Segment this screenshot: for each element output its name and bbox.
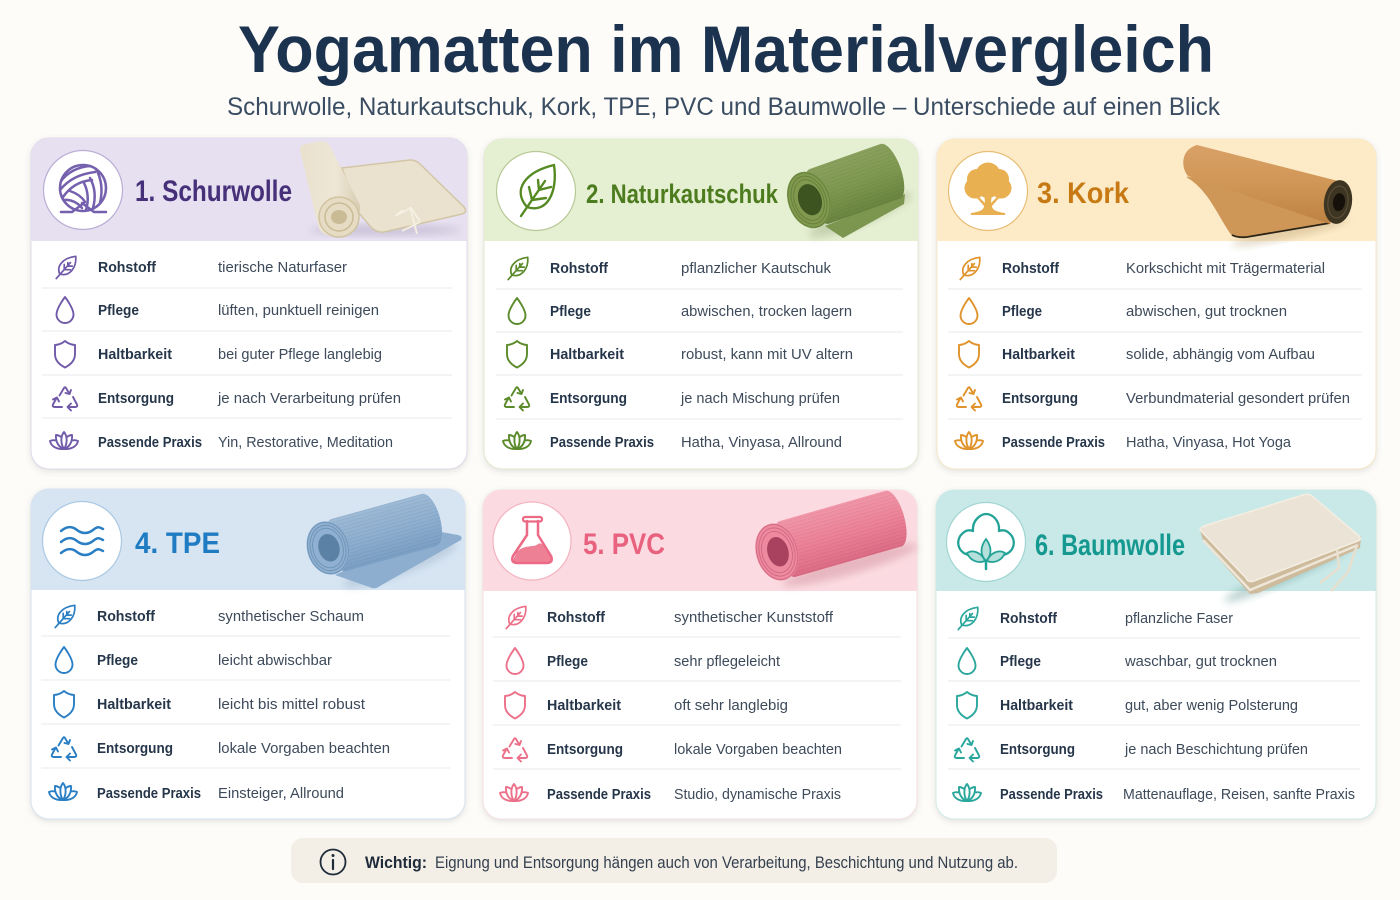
- row: Rohstoff: [55, 605, 364, 628]
- photo: wool mat: [300, 141, 466, 237]
- row: Haltbarkeit: Haltbarkeit: [550, 346, 624, 363]
- row: Pflege: abwischen, trocken lagern: [681, 303, 852, 320]
- row: Passende Praxis: [500, 784, 841, 803]
- row: Haltbarkeit: Haltbarkeit: [97, 696, 171, 713]
- icon: waves: [42, 502, 122, 580]
- row: Entsorgung: Entsorgung: [98, 390, 174, 407]
- row: Passende Praxis: [503, 432, 842, 451]
- row: Haltbarkeit: [505, 692, 788, 718]
- row: Pflege: abwischen, gut trocknen: [1126, 303, 1287, 320]
- row: Haltbarkeit: [54, 691, 366, 718]
- row: Pflege: [508, 298, 852, 324]
- row: Haltbarkeit: [55, 341, 382, 368]
- row: Rohstoff: [508, 257, 831, 280]
- row: Passende Praxis: [50, 432, 393, 451]
- row: Rohstoff: synthetischer Kunststoff: [674, 609, 834, 626]
- row: Passende Praxis: Passende Praxis: [98, 434, 202, 451]
- row: Haltbarkeit: [507, 341, 853, 368]
- row: Haltbarkeit: bei guter Pflege langlebig: [218, 346, 382, 363]
- row: Entsorgung: [52, 737, 390, 760]
- row: Haltbarkeit: Haltbarkeit: [1002, 346, 1075, 363]
- row: Haltbarkeit: [959, 341, 1315, 368]
- row: Passende Praxis: [953, 784, 1355, 803]
- row: Passende Praxis: Passende Praxis: [1000, 786, 1103, 803]
- row: Entsorgung: Entsorgung: [550, 390, 627, 407]
- row: Rohstoff: Rohstoff: [97, 608, 156, 625]
- row: Pflege: Pflege: [97, 652, 138, 669]
- row: Pflege: [958, 648, 1277, 674]
- row: Haltbarkeit: Haltbarkeit: [547, 697, 621, 714]
- row: Haltbarkeit: Haltbarkeit: [1000, 697, 1073, 714]
- row: Passende Praxis: [955, 432, 1292, 451]
- photo: pink PVC mat: [749, 488, 920, 593]
- callout label: Wichtig:: [365, 853, 427, 872]
- heading: 4. TPE: 4. TPE: [135, 527, 220, 560]
- panel: 3. Kork: [937, 139, 1376, 469]
- row: Passende Praxis: [49, 783, 344, 802]
- header band: PVC: [483, 490, 917, 591]
- subtitle: Schurwolle, Naturkautschuk, Kork, TPE, PVC und Baumwolle – Unterschiede auf einen Blick: [227, 93, 1220, 121]
- icon: cotton: [946, 502, 1026, 582]
- row: Haltbarkeit: solide, abhängig vom Aufbau: [1126, 346, 1315, 363]
- row: Entsorgung: Entsorgung: [1002, 390, 1078, 407]
- row: Haltbarkeit: [957, 692, 1298, 718]
- title: Yogamatten im Materialvergleich: [238, 12, 1214, 86]
- row: Pflege: lüften, punktuell reinigen: [218, 302, 379, 319]
- row: Rohstoff: Rohstoff: [547, 609, 606, 626]
- row: Rohstoff: [960, 257, 1325, 280]
- row: Haltbarkeit: robust, kann mit UV altern: [681, 346, 853, 363]
- icon: info: [320, 850, 346, 874]
- panel: 5. PVC: [483, 488, 920, 819]
- row: Passende Praxis: Hatha, Vinyasa, Allround: [681, 434, 842, 451]
- icon: yarn ball: [44, 150, 122, 230]
- header band: Schurwolle: [31, 138, 467, 241]
- row: Pflege: Pflege: [550, 303, 591, 320]
- row: Pflege: sehr pflegeleicht: [674, 653, 781, 670]
- panel: 6. Baumwolle: [936, 490, 1376, 819]
- row: Rohstoff: pflanzliche Faser: [1125, 610, 1233, 627]
- row: Passende Praxis: Passende Praxis: [550, 434, 654, 451]
- row: Pflege: [506, 648, 781, 674]
- row: Haltbarkeit: gut, aber wenig Polsterung: [1125, 697, 1298, 714]
- row: Passende Praxis: Yin, Restorative, Meditation: [218, 434, 393, 451]
- row: Rohstoff: Rohstoff: [1000, 610, 1058, 627]
- header band: Kork: [937, 139, 1376, 241]
- row: Pflege: leicht abwischbar: [218, 652, 332, 669]
- row: Passende Praxis: Passende Praxis: [1002, 434, 1105, 451]
- row: Passende Praxis: Passende Praxis: [97, 785, 201, 802]
- row: Rohstoff: Rohstoff: [1002, 260, 1060, 277]
- row: Rohstoff: [56, 256, 347, 279]
- photo: green rubber mat: [780, 140, 915, 245]
- row: Passende Praxis: Mattenauflage, Reisen, sanfte Praxis: [1123, 786, 1355, 803]
- row: Entsorgung: lokale Vorgaben beachten: [218, 740, 390, 757]
- row: Passende Praxis: Studio, dynamische Praxis: [674, 786, 841, 803]
- row: Pflege: [56, 297, 379, 323]
- photo: folded cotton mat: [1200, 494, 1361, 609]
- photo: cork mat: [1183, 145, 1355, 250]
- row: Rohstoff: Rohstoff: [98, 259, 157, 276]
- row: Haltbarkeit: oft sehr langlebig: [674, 697, 788, 714]
- row: Passende Praxis: Einsteiger, Allround: [218, 785, 344, 802]
- row: Rohstoff: tierische Naturfaser: [218, 259, 347, 276]
- row: Entsorgung: [503, 738, 842, 762]
- callout text: Eignung und Entsorgung hängen auch von Verarbeitung, Beschichtung und Nutzung ab.: [435, 853, 1018, 872]
- row: Entsorgung: Verbundmaterial gesondert prüfen: [1126, 390, 1350, 407]
- row: Rohstoff: pflanzlicher Kautschuk: [681, 260, 831, 277]
- row: Pflege: Pflege: [1000, 653, 1041, 670]
- icon: leaf: [496, 152, 576, 230]
- heading: 6. Baumwolle: 6. Baumwolle: [1035, 529, 1185, 562]
- row: Entsorgung: lokale Vorgaben beachten: [674, 741, 842, 758]
- header band: Naturkautschuk: [484, 139, 918, 241]
- heading: 1. Schurwolle: 1. Schurwolle: [135, 175, 292, 208]
- panel: 2. Naturkautschuk: [484, 139, 918, 469]
- row: Entsorgung: [505, 387, 840, 410]
- row: Pflege: Pflege: [1002, 303, 1042, 320]
- header band: Baumwolle: [936, 490, 1376, 591]
- row: Haltbarkeit: Haltbarkeit: [98, 346, 172, 363]
- heading: 5. PVC: 5. PVC: [583, 528, 665, 561]
- row: Entsorgung: Entsorgung: [97, 740, 173, 757]
- row: Pflege: Pflege: [547, 653, 588, 670]
- row: Entsorgung: Entsorgung: [547, 741, 623, 758]
- callout: Wichtig: [291, 838, 1057, 883]
- row: Passende Praxis: Hatha, Vinyasa, Hot Yoga: [1126, 434, 1292, 451]
- photo: blue TPE mat: [301, 491, 462, 595]
- row: Rohstoff: synthetischer Schaum: [218, 608, 364, 625]
- row: Pflege: Pflege: [98, 302, 139, 319]
- heading: 2. Naturkautschuk: 2. Naturkautschuk: [586, 179, 779, 209]
- row: Entsorgung: [53, 387, 401, 410]
- row: Rohstoff: [506, 606, 834, 629]
- row: Pflege: [960, 298, 1287, 324]
- row: Pflege: waschbar, gut trocknen: [1124, 653, 1277, 670]
- row: Rohstoff: Rohstoff: [550, 260, 609, 277]
- row: Entsorgung: je nach Beschichtung prüfen: [1124, 741, 1308, 758]
- row: Passende Praxis: Passende Praxis: [547, 786, 651, 803]
- row: Pflege: [56, 647, 332, 673]
- row: Haltbarkeit: leicht bis mittel robust: [218, 696, 366, 713]
- heading: 3. Kork: 3. Kork: [1037, 177, 1129, 210]
- header band: TPE: [31, 489, 465, 590]
- row: Entsorgung: Entsorgung: [1000, 741, 1075, 758]
- row: Rohstoff: [958, 607, 1233, 630]
- panel: 4. TPE: [31, 489, 465, 819]
- panel: 1. Schurwolle: [31, 138, 467, 469]
- icon: flask: [493, 502, 571, 580]
- row: Entsorgung: [957, 387, 1350, 410]
- row: Entsorgung: je nach Verarbeitung prüfen: [217, 390, 401, 407]
- row: Rohstoff: Korkschicht mit Trägermaterial: [1126, 260, 1325, 277]
- icon: tree: [948, 152, 1028, 230]
- row: Entsorgung: je nach Mischung prüfen: [680, 390, 840, 407]
- row: Entsorgung: [955, 738, 1308, 762]
